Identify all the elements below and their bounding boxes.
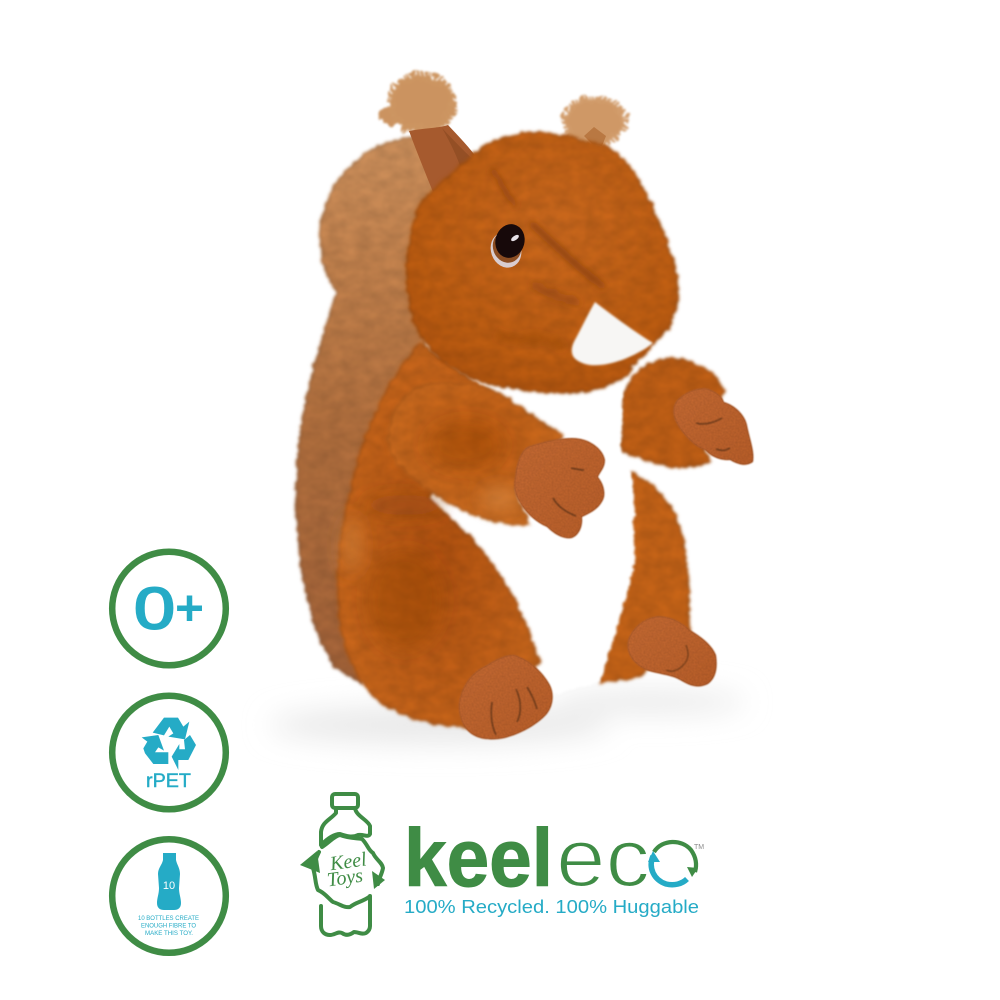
belly (434, 378, 634, 694)
badge: rPET (112, 696, 226, 809)
left ear tuft (378, 76, 454, 132)
brow and face fur streaks (494, 172, 600, 345)
right ear tuft (565, 99, 625, 146)
near foot (459, 655, 553, 739)
logo: keeleco wordmark: keel (404, 813, 553, 904)
Keel Toys wordmark: Toys (326, 865, 365, 891)
badge: age 0+: + (175, 580, 204, 636)
left ear (409, 125, 482, 192)
icon: bottle: 10 (163, 880, 175, 892)
tail (295, 136, 450, 684)
logo: keeleco wordmark: ec (556, 811, 650, 904)
arm shading (427, 421, 520, 510)
tagline: 100% Recycled. 100% Huggable (404, 896, 699, 917)
thigh shading (342, 495, 445, 650)
badge: age 0+ (112, 552, 226, 665)
Keel Toys wordmark (326, 848, 368, 891)
Keel Toys wordmark: Keel (328, 848, 368, 875)
ground shadow (270, 691, 745, 743)
icon: recycling arrows (142, 718, 196, 770)
far foot (627, 616, 717, 687)
muzzle (572, 302, 653, 365)
rPET label: rPET (146, 771, 191, 792)
logo: keeleco wordmark (404, 811, 704, 904)
logo: Keel Toys bottle (300, 794, 385, 935)
icon: recycling o (648, 842, 698, 885)
bottles caption: MAKE THIS TOY. (145, 930, 193, 937)
body and near leg (337, 342, 540, 727)
near paw (514, 438, 605, 538)
far leg (600, 472, 690, 683)
head (406, 132, 678, 393)
bottles caption: ENOUGH FIBRE TO (141, 922, 196, 930)
eye (486, 221, 528, 272)
badge: 10 bottles (112, 839, 226, 953)
near arm (387, 382, 565, 526)
far arm (620, 358, 725, 468)
logo: keeleco wordmark: TM (694, 844, 704, 851)
bottles caption (138, 915, 199, 937)
badge: age 0+: 0 (134, 576, 175, 642)
far paw (673, 388, 753, 465)
bottles caption: 10 BOTTLES CREATE (138, 915, 199, 922)
squirrel plush toy (295, 76, 753, 739)
